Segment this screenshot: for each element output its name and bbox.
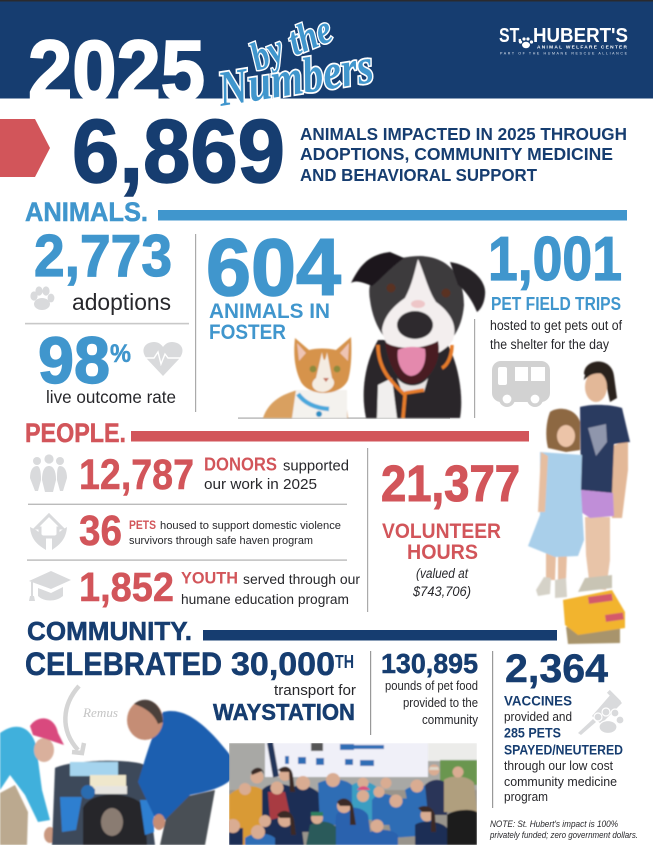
photo: dog xyxy=(351,252,485,418)
stat: pet food: 130,895 xyxy=(381,648,478,679)
stat: pets: 36 xyxy=(79,507,122,555)
label: pet field trips: PET FIELD TRIPS xyxy=(491,293,621,314)
photo: Remus crate transport xyxy=(0,700,238,845)
stat: youth: 1,852 xyxy=(79,564,174,610)
headline description: ADOPTIONS, COMMUNITY MEDICINE xyxy=(300,144,613,164)
photo: orange cat xyxy=(263,337,351,418)
text: vaccines: through our low cost xyxy=(504,758,613,773)
text: vaccines xyxy=(504,692,623,804)
text: pet food: community xyxy=(422,713,479,727)
stat: foster: 604 xyxy=(206,223,341,313)
logo xyxy=(499,25,628,56)
text: valued at xyxy=(412,566,471,599)
icon: syringe and paw xyxy=(578,690,624,735)
text: vaccines: VACCINES xyxy=(504,692,572,708)
text: donors: supported xyxy=(283,458,349,474)
stat: celebrated: CELEBRATED xyxy=(25,646,222,682)
icon: graduation cap xyxy=(29,571,71,601)
text: vaccines: community medicine xyxy=(504,774,617,789)
text: pets: housed to support domestic violence xyxy=(160,520,341,532)
text: field trips description: the shelter for the day xyxy=(490,337,609,352)
stat: celebrated: 30,000 xyxy=(231,646,335,682)
panel: people xyxy=(25,362,630,644)
label: volunteer hours xyxy=(382,519,501,564)
text: youth: humane education program xyxy=(181,591,349,607)
arrow: to Remus xyxy=(65,686,84,753)
stat: field trips: 1,001 xyxy=(488,225,622,294)
stat: vaccines: 2,364 xyxy=(505,647,609,691)
stat: live outcome: 98 xyxy=(38,323,110,397)
text: pets: survivors through safe haven program xyxy=(129,535,313,547)
stat: adoptions: 2,773 xyxy=(34,223,172,289)
title: 2025: 2025 xyxy=(28,24,205,119)
text: valued at: (valued at xyxy=(416,566,469,581)
panel: community xyxy=(0,618,624,845)
headline number: 6,869 xyxy=(72,102,285,202)
title script: by the: by the xyxy=(244,6,338,79)
text: donors xyxy=(204,454,349,493)
headline description xyxy=(300,124,627,185)
label: volunteer hours: VOLUNTEER xyxy=(382,519,501,543)
text: vaccines: 285 PETS xyxy=(504,724,561,740)
icon: logo paw xyxy=(519,37,533,48)
text: pet food xyxy=(385,679,479,727)
logo: ST. xyxy=(499,25,522,47)
text: pets: PETS xyxy=(129,518,156,532)
icon: people xyxy=(30,454,67,492)
percent sign: % xyxy=(110,340,131,368)
text: youth: YOUTH xyxy=(181,568,238,588)
stat: volunteer hours: 21,377 xyxy=(381,455,520,512)
icon: paw xyxy=(30,286,54,310)
title script: Numbers: Numbers xyxy=(213,37,377,117)
label: animals in foster: ANIMALS IN xyxy=(209,299,330,323)
text: pet food: pounds of pet food xyxy=(385,679,478,693)
label: live outcome rate: live outcome rate xyxy=(46,387,176,407)
label: animals in foster: FOSTER xyxy=(209,320,286,344)
label: waystation: WAYSTATION xyxy=(213,699,355,725)
label: volunteer hours: HOURS xyxy=(407,540,478,564)
text: field trips description: hosted to get pets out of xyxy=(490,318,622,333)
text: youth xyxy=(181,568,360,607)
text: valued at: $743,706) xyxy=(412,584,471,599)
logo: ANIMAL WELFARE CENTER xyxy=(537,44,628,50)
photo: two girls with pet food xyxy=(528,362,630,644)
text: vaccines: SPAYED/NEUTERED xyxy=(504,742,623,758)
stat: donors: 12,787 xyxy=(79,451,194,499)
label: Remus: Remus xyxy=(82,705,118,720)
text: transport for: transport for xyxy=(274,682,356,699)
note: privately funded; zero government dollars. xyxy=(489,830,638,840)
logo: PART OF THE HUMANE RESCUE ALLIANCE xyxy=(500,52,628,56)
stat: celebrated: TH xyxy=(335,652,354,672)
label: adoptions: adoptions xyxy=(72,289,171,315)
stat: celebrated xyxy=(25,646,354,682)
headline description: AND BEHAVIORAL SUPPORT xyxy=(300,165,537,185)
text: youth: served through our xyxy=(243,571,360,587)
header band xyxy=(0,0,653,119)
photo: team group xyxy=(226,742,477,845)
heading: animals: ANIMALS. xyxy=(25,197,148,227)
icon: heart pulse xyxy=(143,342,183,376)
logo: HUBERT'S xyxy=(533,25,628,47)
icon: hands and house xyxy=(30,515,67,550)
note: NOTE: St. Hubert's impact is 100% xyxy=(490,819,618,829)
heading: people: PEOPLE. xyxy=(25,418,126,448)
red arrow xyxy=(0,119,50,177)
text: donors: our work in 2025 xyxy=(204,476,317,493)
text: field trips description xyxy=(490,318,622,352)
icon: bus xyxy=(492,361,550,407)
text: donors: DONORS xyxy=(204,454,277,474)
text: vaccines: program xyxy=(504,789,548,804)
text: vaccines: provided and xyxy=(504,709,572,724)
text: pets xyxy=(129,518,341,547)
panel: animals xyxy=(25,197,627,419)
note xyxy=(489,819,638,840)
label: animals in foster xyxy=(209,299,330,344)
text: pet food: provided to the xyxy=(403,696,478,710)
heading: community: COMMUNITY. xyxy=(27,618,192,646)
headline description: ANIMALS IMPACTED IN 2025 THROUGH xyxy=(300,124,627,144)
